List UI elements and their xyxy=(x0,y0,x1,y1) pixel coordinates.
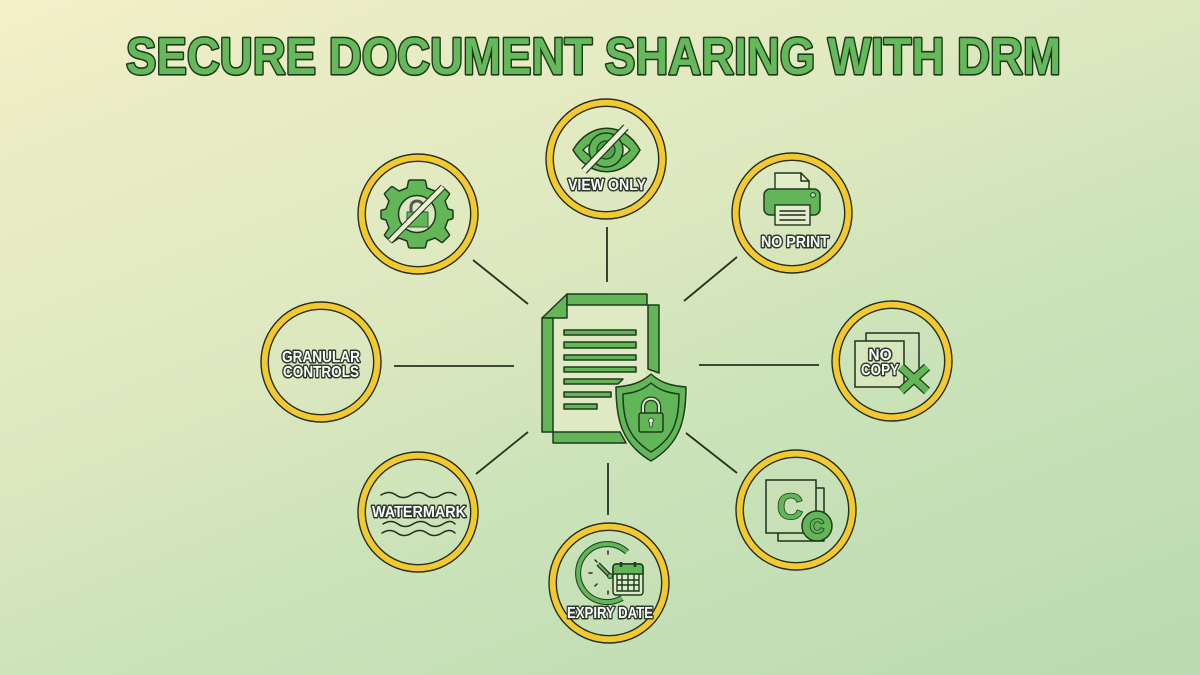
icon: gear with crossed lock xyxy=(381,180,453,248)
node: no print xyxy=(732,153,852,273)
icon: clock and calendar xyxy=(578,544,643,602)
icon: copyright pages xyxy=(766,480,832,541)
label: NO PRINT xyxy=(761,234,829,251)
node: settings lock xyxy=(358,154,478,274)
label: CONTROLS xyxy=(283,364,359,381)
node: expiry date xyxy=(549,523,669,643)
node: view only xyxy=(546,99,666,219)
label xyxy=(282,349,360,381)
icon: copies with cross xyxy=(855,333,927,391)
title: SECURE DOCUMENT SHARING WITH DRM xyxy=(126,28,1061,86)
icon: printer xyxy=(764,173,820,225)
node: no copy xyxy=(832,301,952,421)
icon: copyright pages: C xyxy=(810,516,824,538)
central document with shield xyxy=(542,294,688,462)
label: VIEW ONLY xyxy=(568,177,647,194)
label: EXPIRY DATE xyxy=(567,605,653,622)
node: copyright xyxy=(736,450,856,570)
icon: crossed eye xyxy=(573,127,640,172)
label: NO xyxy=(868,347,892,364)
node: watermark xyxy=(358,452,478,572)
label: GRANULAR xyxy=(282,349,360,366)
connector lines xyxy=(394,227,819,515)
icon: copyright pages: C xyxy=(777,486,803,527)
document icon xyxy=(542,294,659,443)
label: WATERMARK xyxy=(372,504,467,521)
icon: waves xyxy=(381,492,456,536)
node: no copy: COPY xyxy=(861,362,900,379)
shield with padlock xyxy=(614,371,688,462)
node: granular controls xyxy=(261,302,381,422)
